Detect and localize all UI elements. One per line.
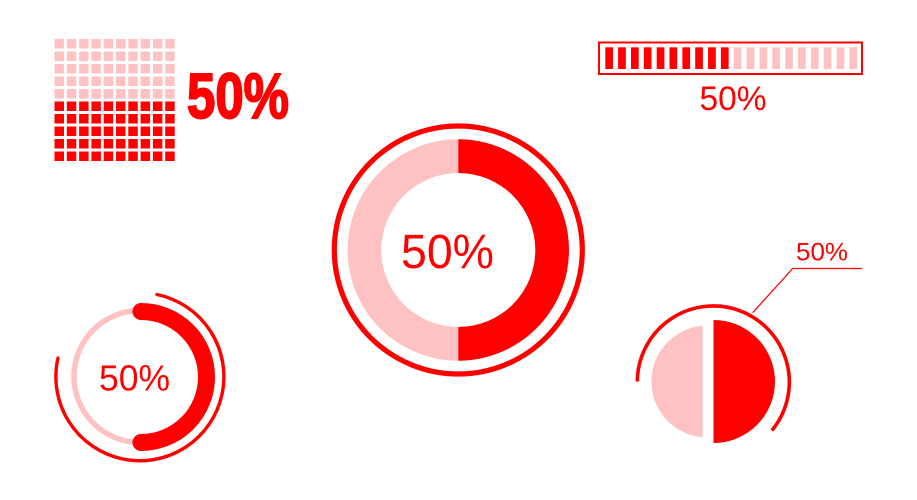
panel: segmented progress bar [599, 42, 862, 118]
gauge label: 50% [99, 358, 170, 398]
callout label: 50% [796, 238, 848, 266]
waffle grid: light squares [54, 39, 175, 98]
thin outer arc [56, 294, 224, 461]
light donut half [348, 139, 458, 361]
red gauge arc [141, 312, 206, 442]
waffle label: 50% [187, 60, 289, 132]
bar frame [599, 42, 862, 74]
panel: waffle chart with bold label [54, 39, 289, 161]
panel: rounded gauge [56, 294, 224, 461]
donut label: 50% [401, 226, 494, 279]
outer ring [334, 126, 582, 374]
waffle grid: red squares [54, 102, 175, 161]
panel: central donut chart [334, 126, 582, 374]
filled bar segments [605, 47, 729, 69]
empty bar segments [734, 47, 857, 69]
light pie half [651, 326, 703, 437]
bar label: 50% [700, 80, 766, 118]
light gauge arc [74, 310, 140, 442]
red donut half [458, 139, 569, 361]
panel: split pie with callout [637, 238, 862, 443]
callout leader line [753, 268, 862, 313]
outer arc [637, 306, 789, 430]
red pie half [714, 320, 775, 443]
